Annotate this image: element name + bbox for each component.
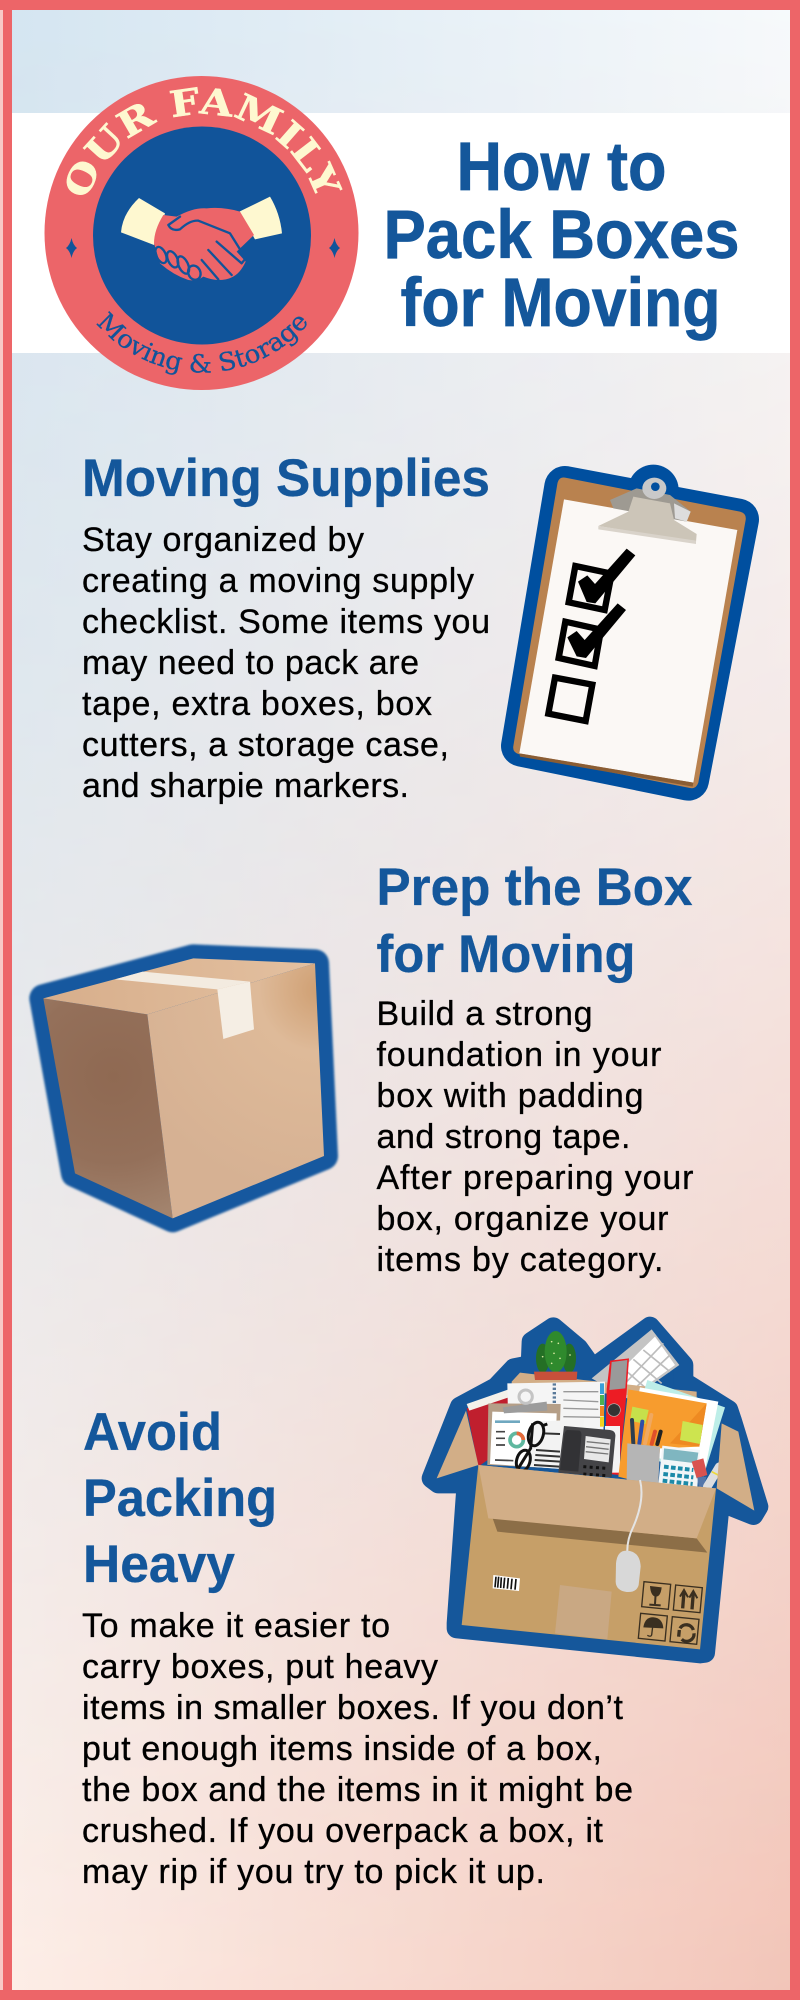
icon: cardboard box bbox=[43, 958, 324, 1218]
red book bbox=[467, 1386, 525, 1467]
section 2 body: foundation in your bbox=[376, 1036, 662, 1074]
section 3 heading: Packing bbox=[83, 1469, 277, 1528]
paper sheet bbox=[530, 1419, 584, 1471]
section 1 body bbox=[82, 521, 490, 805]
section 1 body: tape, extra boxes, box bbox=[82, 685, 432, 723]
section 3 body bbox=[82, 1607, 633, 1891]
section 2 body: box with padding bbox=[376, 1077, 644, 1115]
telephone bbox=[558, 1426, 615, 1477]
icon: box of office items bbox=[432, 1327, 758, 1653]
box body bbox=[462, 1465, 716, 1649]
keyboard bbox=[592, 1329, 679, 1400]
papers bbox=[627, 1380, 725, 1477]
section 3 body: carry boxes, put heavy bbox=[82, 1648, 438, 1686]
section 1 body: may need to pack are bbox=[82, 644, 419, 682]
section 1 body: checklist. Some items you bbox=[82, 603, 490, 641]
handling symbols bbox=[638, 1582, 702, 1644]
logo text: OUR FAMILY: OUR FAMILY bbox=[66, 86, 343, 195]
section 2 heading: for Moving bbox=[376, 925, 636, 984]
section 2 heading: Prep the Box bbox=[376, 858, 693, 917]
notebook bbox=[507, 1382, 605, 1433]
barcode bbox=[493, 1575, 520, 1591]
section 1 body: creating a moving supply bbox=[82, 562, 474, 600]
orange folder bbox=[618, 1389, 707, 1487]
calculator bbox=[658, 1446, 700, 1487]
shipping label patch bbox=[555, 1585, 612, 1639]
section 3 body: To make it easier to bbox=[82, 1607, 390, 1645]
cactus bbox=[534, 1331, 577, 1380]
side flaps bbox=[437, 1411, 754, 1511]
handshake icon bbox=[121, 197, 282, 282]
logo diamonds bbox=[66, 238, 340, 258]
flap shadow bbox=[493, 1518, 707, 1553]
section 2 body: items by category. bbox=[376, 1241, 664, 1279]
section 2 body bbox=[376, 995, 694, 1279]
section 1 body: and sharpie markers. bbox=[82, 767, 409, 805]
pens bbox=[632, 1415, 661, 1444]
small clipboard bbox=[487, 1390, 561, 1468]
section 3 heading bbox=[83, 1403, 277, 1594]
section 2 body: and strong tape. bbox=[376, 1118, 630, 1156]
check boxes bbox=[548, 566, 612, 721]
front flap bbox=[478, 1465, 716, 1538]
section 1 body: cutters, a storage case, bbox=[82, 726, 449, 764]
section 3 body: put enough items inside of a box, bbox=[82, 1730, 602, 1768]
mouse and cable bbox=[616, 1480, 641, 1592]
header white band bbox=[12, 113, 790, 353]
logo text: Moving & Storage: Moving & Storage bbox=[96, 311, 307, 375]
section 2 body: After preparing your bbox=[376, 1159, 694, 1197]
logo badge bbox=[44, 76, 358, 390]
section 2 body: box, organize your bbox=[376, 1200, 668, 1238]
title: Pack Boxes bbox=[384, 196, 740, 273]
section 3 body: crushed. If you overpack a box, it bbox=[82, 1812, 604, 1850]
section 1 heading: Moving Supplies bbox=[82, 449, 490, 508]
section 3 heading: Avoid bbox=[83, 1403, 222, 1462]
section 3 body: may rip if you try to pick it up. bbox=[82, 1853, 545, 1891]
blue outline bbox=[432, 1327, 758, 1653]
section 1 body: Stay organized by bbox=[82, 521, 364, 559]
glasses bbox=[514, 1421, 547, 1473]
icon: clipboard checklist bbox=[513, 465, 746, 788]
section 3 heading: Heavy bbox=[83, 1535, 236, 1594]
clip bbox=[598, 478, 697, 544]
section 2 body: Build a strong bbox=[376, 995, 592, 1033]
section 3 body: the box and the items in it might be bbox=[82, 1771, 633, 1809]
title: How to bbox=[456, 128, 666, 205]
title bbox=[384, 128, 740, 341]
sticky notes bbox=[630, 1407, 649, 1424]
back flap bbox=[512, 1373, 697, 1400]
eraser and marker bbox=[692, 1458, 720, 1487]
title: for Moving bbox=[400, 264, 720, 341]
section 3 body: items in smaller boxes. If you don’t bbox=[82, 1689, 624, 1727]
pen cup bbox=[627, 1443, 660, 1483]
red binder bbox=[605, 1358, 629, 1475]
section 2 heading bbox=[376, 858, 693, 984]
check marks bbox=[567, 549, 635, 658]
